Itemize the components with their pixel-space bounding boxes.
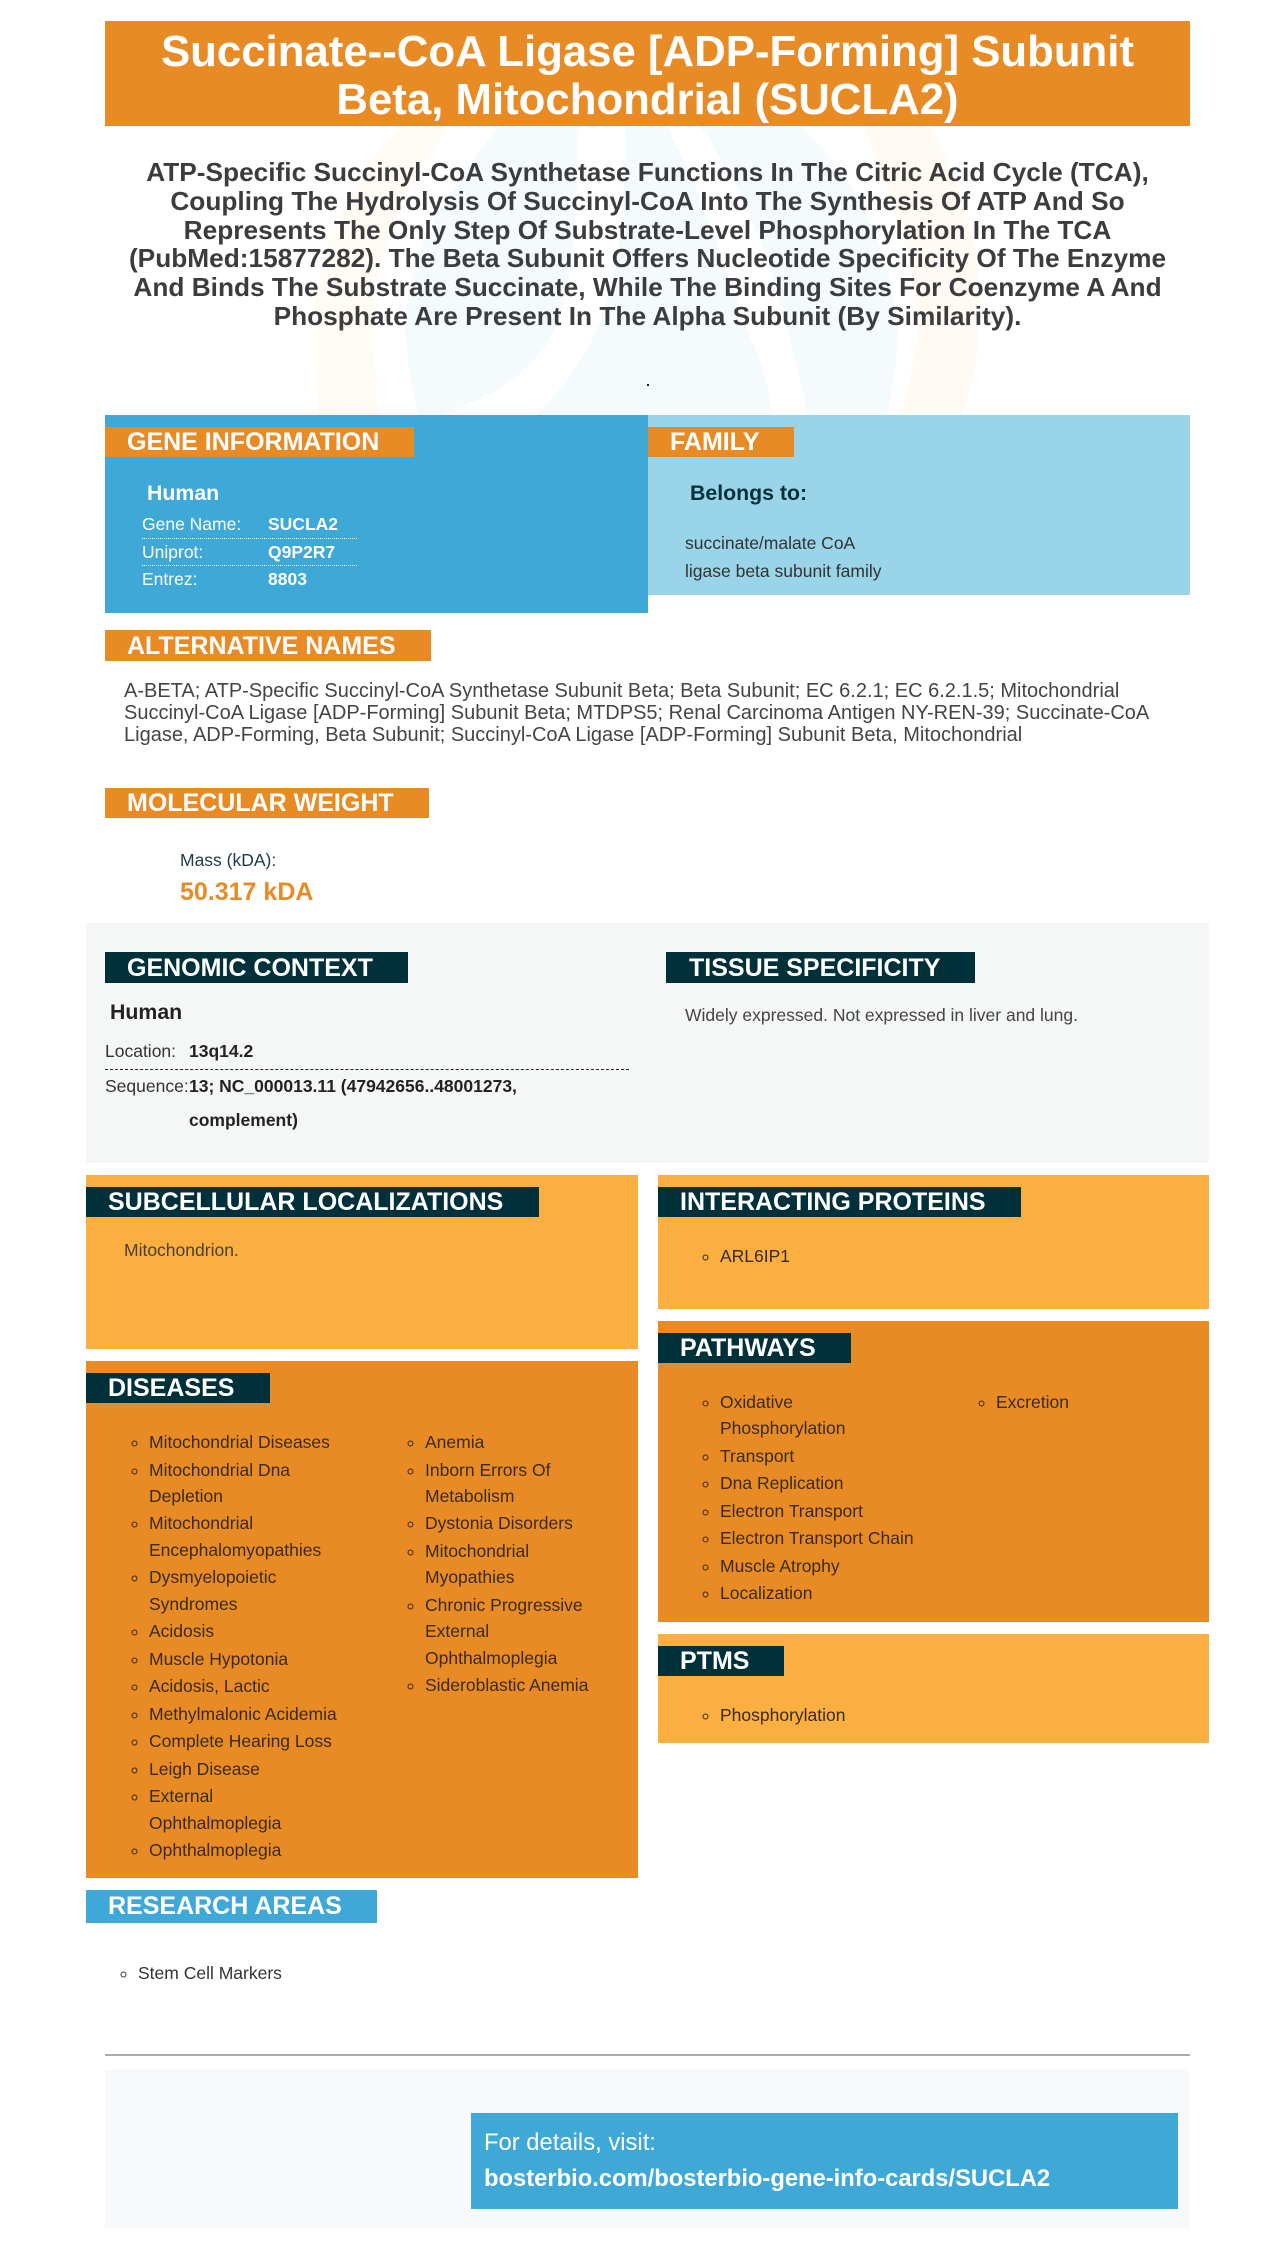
tissue specificity text: Widely expressed. Not expressed in liver and lung. — [685, 1005, 1078, 1025]
sequence row — [105, 1076, 517, 1130]
footer rule — [105, 2054, 1190, 2056]
summary text: Coupling The Hydrolysis Of Succinyl-CoA Into The Synthesis Of ATP And So — [170, 186, 1125, 216]
diseases list column 2: External — [425, 1621, 489, 1641]
diseases list column 1: Leigh Disease — [149, 1759, 260, 1779]
diseases list column 1: Complete Hearing Loss — [149, 1731, 332, 1751]
diseases list column 1: Mitochondrial Dna — [149, 1460, 290, 1480]
uniprot row: Q9P2R7 — [268, 542, 335, 562]
heading: molecular weight: MOLECULAR WEIGHT — [127, 789, 394, 817]
diseases list column 2: Ophthalmoplegia — [425, 1648, 557, 1668]
heading: interacting proteins: INTERACTING PROTEINS — [680, 1188, 986, 1216]
sequence row: Sequence: — [105, 1076, 189, 1096]
species label: Human — [147, 481, 219, 505]
diseases list column 1: Syndromes — [149, 1594, 238, 1614]
diseases list column 1: Ophthalmoplegia — [149, 1840, 281, 1860]
heading: ptms — [658, 1646, 784, 1676]
heading: pathways: PATHWAYS — [680, 1334, 816, 1362]
diseases list column 2: Anemia — [425, 1432, 484, 1452]
belongs to label: Belongs to: — [690, 481, 807, 505]
summary text — [129, 157, 1166, 331]
summary text: Represents The Only Step Of Substrate-Level Phosphorylation In The TCA — [184, 215, 1111, 245]
diseases list column 1: Muscle Hypotonia — [149, 1649, 288, 1669]
diseases list column 2: Mitochondrial — [425, 1541, 529, 1561]
heading: ptms: PTMS — [680, 1647, 749, 1675]
diseases list column 1: Mitochondrial Diseases — [149, 1432, 330, 1452]
panel: gene information — [105, 415, 648, 613]
title — [105, 21, 1190, 126]
alternative names text — [124, 680, 1150, 746]
pathways list column 2: Excretion — [996, 1392, 1069, 1412]
location row — [105, 1041, 253, 1061]
pathways list column 1: Oxidative — [720, 1392, 793, 1412]
diseases list column 1: Ophthalmoplegia — [149, 1813, 281, 1833]
heading: family — [648, 427, 794, 457]
mass label: Mass (kDA): — [180, 850, 276, 870]
diseases list column 2 — [408, 1432, 588, 1695]
title: Succinate--CoA Ligase [ADP-Forming] Subunit — [161, 27, 1134, 76]
diseases list column 1: Encephalomyopathies — [149, 1540, 321, 1560]
pathways list column 1: Dna Replication — [720, 1473, 844, 1493]
heading: pathways — [658, 1333, 851, 1363]
mass value: 50.317 kDA — [180, 878, 313, 906]
panel: pathways — [658, 1321, 1209, 1622]
diseases list column 2: Sideroblastic Anemia — [425, 1675, 588, 1695]
alternative names text: Ligase, ADP-Forming, Beta Subunit; Succinyl-CoA Ligase [ADP-Forming] Subunit Beta, Mitochondrial — [124, 724, 1022, 746]
diseases list column 2: Metabolism — [425, 1486, 514, 1506]
entrez row: Entrez: — [142, 569, 197, 589]
gene name row: Gene Name: — [142, 514, 241, 534]
diseases list column 2: Chronic Progressive — [425, 1595, 583, 1615]
summary text: And Binds The Substrate Succinate, While The Binding Sites For Coenzyme A And — [133, 272, 1162, 302]
panel: ptms — [658, 1634, 1209, 1743]
summary text: (PubMed:15877282). The Beta Subunit Offers Nucleotide Specificity Of The Enzyme — [129, 243, 1166, 273]
heading: genomic context: GENOMIC CONTEXT — [127, 954, 373, 982]
footer panel — [105, 2069, 1190, 2228]
summary text: Phosphate Are Present In The Alpha Subunit (By Similarity). — [274, 301, 1021, 331]
diseases list column 2: Dystonia Disorders — [425, 1513, 573, 1533]
location row: 13q14.2 — [189, 1041, 253, 1061]
details callout — [471, 2113, 1178, 2209]
heading: research areas: RESEARCH AREAS — [108, 1892, 342, 1920]
entrez row — [142, 569, 307, 589]
location row: Location: — [105, 1041, 176, 1061]
heading: alternative names: ALTERNATIVE NAMES — [127, 632, 396, 660]
watermark logo — [315, 126, 980, 415]
pathways list column 1: Localization — [720, 1583, 812, 1603]
dot mark — [647, 384, 649, 386]
ptms list: Phosphorylation — [720, 1705, 846, 1725]
heading: diseases — [86, 1373, 270, 1403]
pathways list column 1 — [702, 1392, 914, 1603]
alternative names text: Succinyl-CoA Ligase [ADP-Forming] Subunit Beta; MTDPS5; Renal Carcinoma Antigen NY-REN-39; Succinate-CoA — [124, 702, 1149, 724]
details url: bosterbio.com/bosterbio-gene-info-cards/SUCLA2 — [484, 2165, 1050, 2192]
pathways list column 1: Muscle Atrophy — [720, 1556, 840, 1576]
details label: For details, visit: — [484, 2129, 656, 2156]
heading: family: FAMILY — [670, 428, 759, 456]
diseases list column 1: External — [149, 1786, 213, 1806]
pathways list column 1: Electron Transport Chain — [720, 1528, 914, 1548]
research areas list: Stem Cell Markers — [138, 1963, 282, 1983]
diseases list column 1: Dysmyelopoietic — [149, 1567, 276, 1587]
entrez row: 8803 — [268, 569, 307, 589]
pathways list column 1: Transport — [720, 1446, 794, 1466]
family description: ligase beta subunit family — [685, 561, 882, 581]
title: Beta, Mitochondrial (SUCLA2) — [336, 75, 959, 124]
family description — [685, 533, 882, 581]
diseases list column 1: Acidosis — [149, 1621, 214, 1641]
diseases list column 1: Mitochondrial — [149, 1513, 253, 1533]
species label: Human — [110, 1000, 182, 1024]
summary text: ATP-Specific Succinyl-CoA Synthetase Functions In The Citric Acid Cycle (TCA), — [146, 157, 1149, 187]
uniprot row — [142, 542, 335, 562]
heading: subcellular localizations: SUBCELLULAR LOCALIZATIONS — [108, 1188, 503, 1216]
heading: tissue specificity: TISSUE SPECIFICITY — [689, 954, 940, 982]
alternative names text: A-BETA; ATP-Specific Succinyl-CoA Synthetase Subunit Beta; Beta Subunit; EC 6.2.1; EC 6.2.1.5; Mitochondrial — [124, 680, 1119, 702]
diseases list column 2: Inborn Errors Of — [425, 1460, 550, 1480]
gene name row: SUCLA2 — [268, 514, 338, 534]
panel: diseases — [86, 1361, 638, 1878]
interacting proteins list: ARL6IP1 — [720, 1246, 790, 1266]
heading: diseases: DISEASES — [108, 1374, 234, 1402]
diseases list column 2: Myopathies — [425, 1567, 514, 1587]
family description: succinate/malate CoA — [685, 533, 855, 553]
diseases list column 1: Methylmalonic Acidemia — [149, 1704, 337, 1724]
sequence row: 13; NC_000013.11 (47942656..48001273, — [189, 1076, 517, 1096]
panel: interacting proteins — [658, 1175, 1209, 1309]
pathways list column 1: Phosphorylation — [720, 1418, 846, 1438]
localization text: Mitochondrion. — [124, 1240, 239, 1260]
panel: subcellular localizations — [86, 1175, 638, 1349]
diseases list column 1: Depletion — [149, 1486, 223, 1506]
pathways list column 1: Electron Transport — [720, 1501, 863, 1521]
panel: genomic context and tissue specificity — [86, 923, 1209, 1163]
gene name row — [142, 514, 338, 534]
uniprot row: Uniprot: — [142, 542, 203, 562]
diseases list column 1 — [132, 1432, 337, 1860]
sequence row: complement) — [189, 1110, 298, 1130]
panel: family — [648, 415, 1190, 595]
diseases list column 1: Acidosis, Lactic — [149, 1676, 270, 1696]
heading: gene information: GENE INFORMATION — [127, 428, 379, 456]
heading: research areas — [86, 1890, 377, 1923]
